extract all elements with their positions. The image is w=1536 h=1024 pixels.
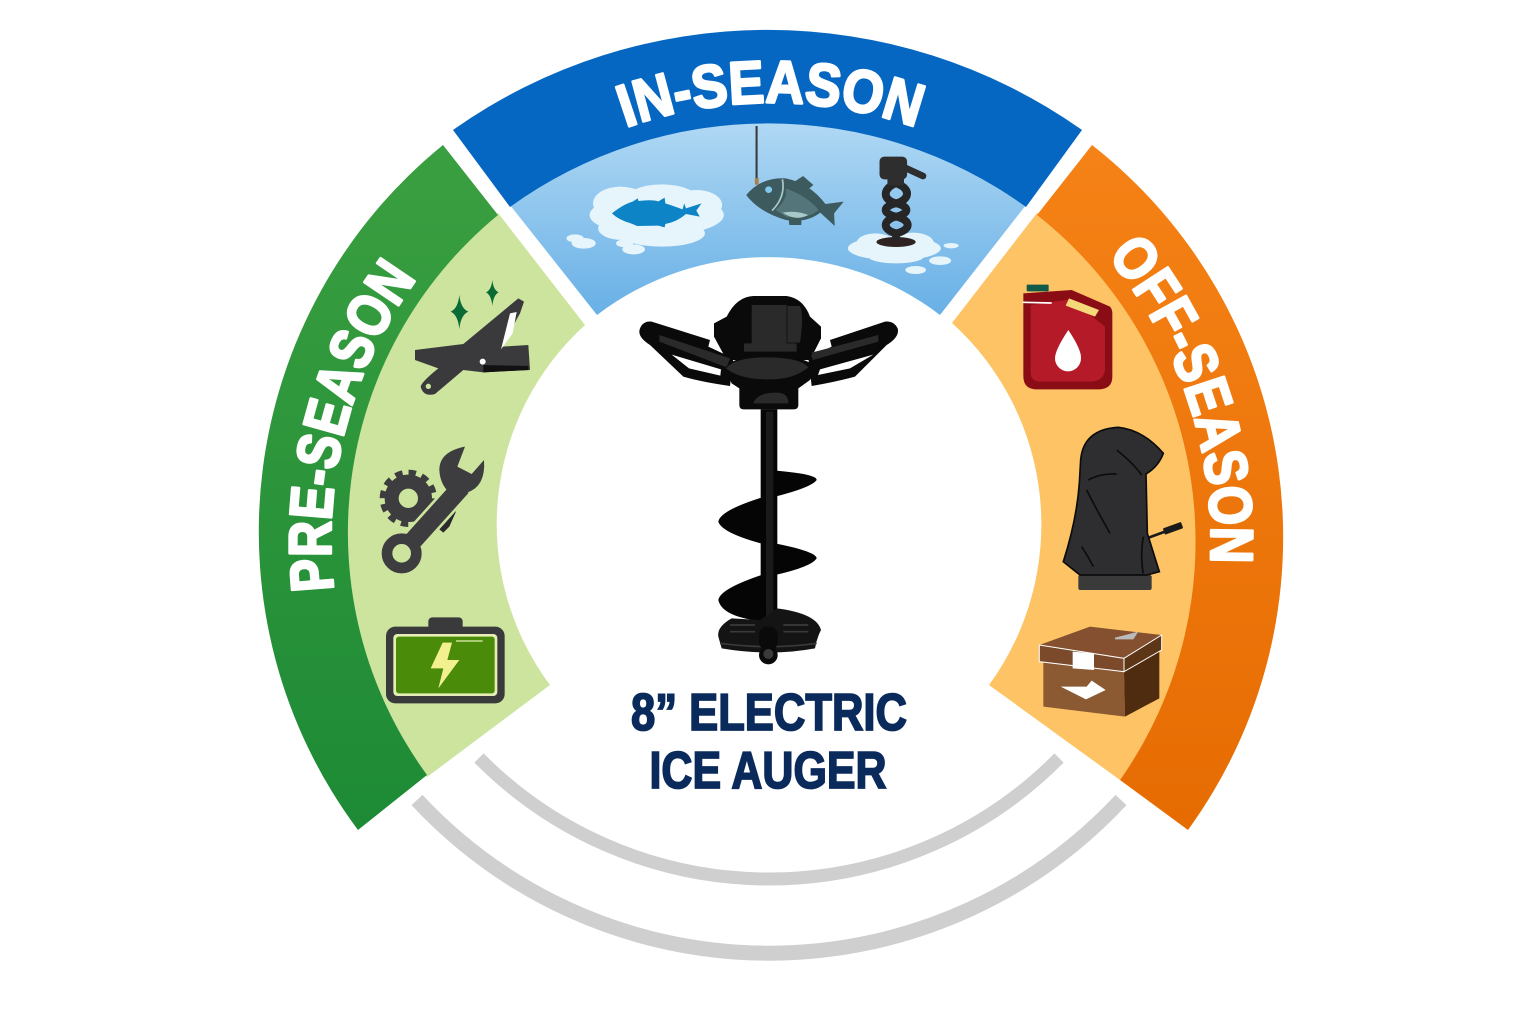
right handle [808, 322, 898, 386]
title line one: 8” ELECTRIC [631, 684, 907, 742]
panel: pre-season [258, 145, 585, 830]
icon: battery [386, 617, 505, 703]
auger base blade [718, 608, 821, 664]
in-season band [453, 30, 1082, 207]
icon: covered auger [1063, 427, 1183, 590]
icon: sharpened blade [415, 280, 530, 395]
in-season heading: IN-SEASON [614, 60, 926, 128]
lower grey arcs [417, 758, 1121, 953]
pre-season band [259, 145, 498, 830]
icon: auger on ice [848, 157, 959, 274]
title line two: ICE AUGER [650, 742, 886, 800]
motor body [725, 356, 817, 409]
pre-season heading: PRE-SEASON [288, 256, 416, 592]
icon: storage box [1039, 627, 1162, 717]
auger shaft and flights [718, 409, 817, 623]
off-season heading: OFF-SEASON [1114, 237, 1254, 562]
off-season inner field [952, 213, 1196, 780]
auger head [714, 296, 821, 360]
pre-season inner field [346, 213, 585, 777]
left handle [639, 322, 733, 386]
icon: wrench and gear [383, 447, 484, 568]
icon: hooked fish [746, 126, 844, 226]
title [631, 684, 907, 800]
icon: fuel jug [1023, 285, 1112, 389]
in-season inner field [510, 121, 1026, 315]
icon: electric ice auger [639, 296, 898, 664]
panel: in-season [453, 30, 1082, 315]
panel: off-season [952, 145, 1284, 830]
off-season band [1037, 145, 1283, 830]
icon: fish under ice [566, 184, 724, 254]
